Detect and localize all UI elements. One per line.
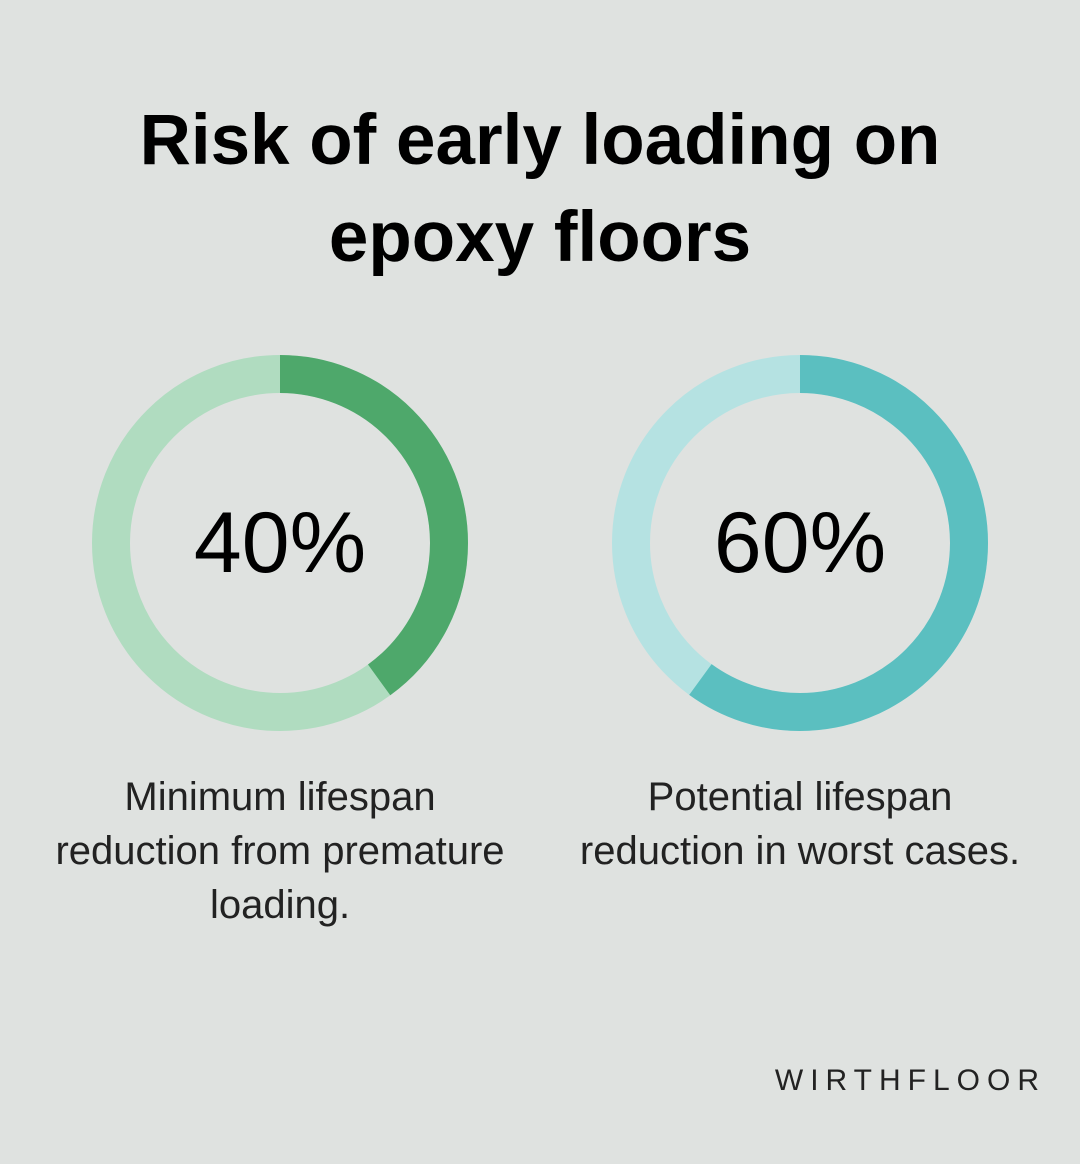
caption: right <box>580 775 1020 873</box>
donut chart: 60% <box>612 355 988 731</box>
title <box>140 101 940 277</box>
caption: left: loading. <box>210 883 350 927</box>
title: Risk of early loading on <box>140 101 940 180</box>
stat: 60%: 60% <box>714 495 886 591</box>
caption: left <box>55 775 505 927</box>
donut chart: 40% <box>92 355 468 731</box>
caption: left: reduction from premature <box>55 829 505 873</box>
caption: right: Potential lifespan <box>648 775 952 819</box>
stat: 40%: 40% <box>194 495 366 591</box>
title: epoxy floors <box>329 198 751 277</box>
caption: left: Minimum lifespan <box>124 775 436 819</box>
brand logo: WIRTHFLOOR <box>775 1064 1046 1097</box>
caption: right: reduction in worst cases. <box>580 829 1020 873</box>
